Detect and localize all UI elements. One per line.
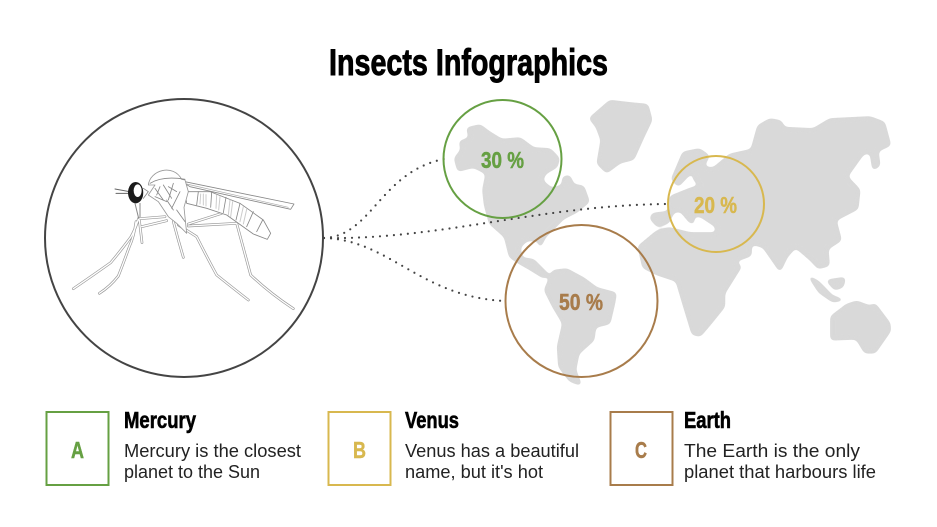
legend item: Mercury: [46, 407, 301, 485]
mosquito circle: [45, 99, 323, 377]
dotted connector: to 20 %: [324, 204, 668, 238]
legend item: Venus: Venus has a beautiful: [405, 441, 579, 461]
proboscis: [115, 189, 129, 193]
marker: 50 %: [506, 225, 658, 377]
legend item: Mercury: planet to the Sun: [124, 462, 260, 482]
abdomen: [185, 192, 271, 239]
legend item: Venus: B: [353, 437, 366, 463]
legend item: Venus: [328, 407, 579, 485]
title: Insects Infographics: [329, 42, 608, 83]
marker: 20 %: 20 %: [694, 192, 737, 218]
thorax: [148, 170, 188, 233]
legend item: Earth: planet that harbours life: [684, 462, 876, 482]
legend item: Earth: C: [635, 437, 647, 463]
legend item: Venus: Venus: [405, 407, 459, 433]
head: [128, 182, 143, 203]
legs: [73, 213, 293, 309]
legend item: Earth: [610, 407, 876, 485]
world map: [455, 101, 890, 385]
marker: 30 %: [444, 100, 562, 218]
marker: 30 %: 30 %: [481, 147, 524, 173]
dotted connector: to 30 %: [324, 159, 444, 238]
legend item: Mercury: A: [71, 437, 84, 463]
legend item: Venus: name, but it's hot: [405, 462, 543, 482]
marker: 50 %: 50 %: [559, 289, 603, 315]
marker: 20 %: [668, 156, 764, 252]
legend item: Earth: Earth: [684, 407, 731, 433]
dotted connector: to 50 %: [324, 238, 505, 301]
legend item: Mercury: Mercury: [124, 407, 196, 433]
icon: mosquito: [73, 170, 294, 309]
legend item: Mercury: Mercury is the closest: [124, 441, 301, 461]
wings: [180, 181, 294, 209]
legend item: Earth: The Earth is the only: [684, 441, 860, 461]
